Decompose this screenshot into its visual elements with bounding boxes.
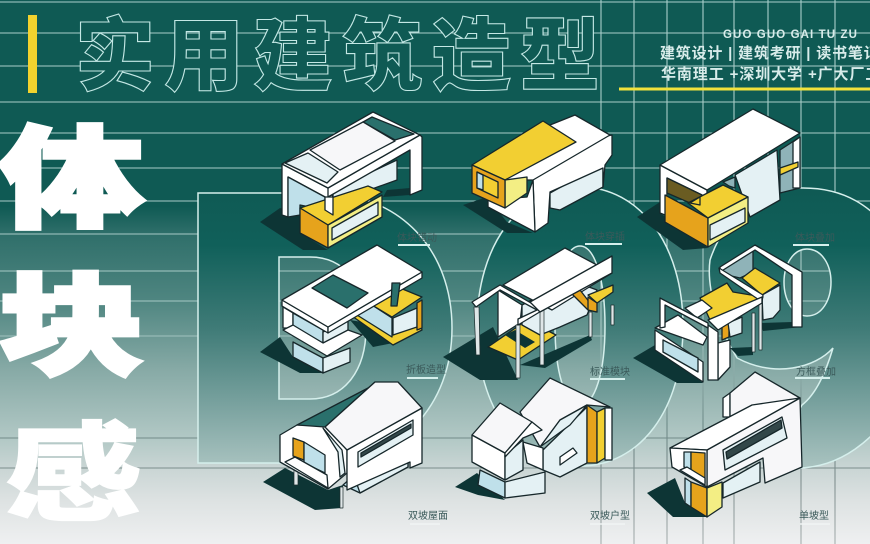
big heading: 体: 体 [0, 120, 143, 242]
building 1 [260, 112, 422, 250]
large outlined numeral D09 [198, 187, 870, 468]
label 6: 方框叠加 [796, 365, 836, 378]
label 4: 折板造型 [406, 363, 446, 376]
numeral 9 [709, 188, 870, 468]
label 9: 单坡型 [799, 509, 829, 522]
letter D [198, 193, 452, 463]
header latin line: GUO GUO GAI TU ZU [723, 29, 858, 41]
big heading: 块: 块 [0, 267, 143, 389]
label 2: 体块穿插 [585, 230, 625, 243]
numeral 0 [477, 187, 683, 466]
building 8 [455, 378, 612, 500]
building 3 [637, 109, 800, 250]
building 4 [260, 245, 422, 373]
label 1: 体块错动 [397, 231, 437, 244]
label 3: 体块叠加 [795, 232, 835, 244]
title: outlined characters: 实用建筑造型 [75, 12, 609, 101]
label 7: 双坡屋面 [408, 509, 448, 522]
label 8: 双坡户型 [590, 509, 630, 522]
yellow title bar [28, 15, 37, 93]
header info block [619, 29, 870, 90]
building 7 [263, 382, 422, 510]
big heading: 感: 感 [5, 415, 141, 536]
label 5: 标准模块 [590, 366, 630, 378]
yellow rule [619, 88, 870, 90]
building 6 [633, 245, 802, 383]
building 2 [463, 115, 612, 233]
building 9 [647, 372, 802, 517]
building 5 [443, 248, 614, 380]
